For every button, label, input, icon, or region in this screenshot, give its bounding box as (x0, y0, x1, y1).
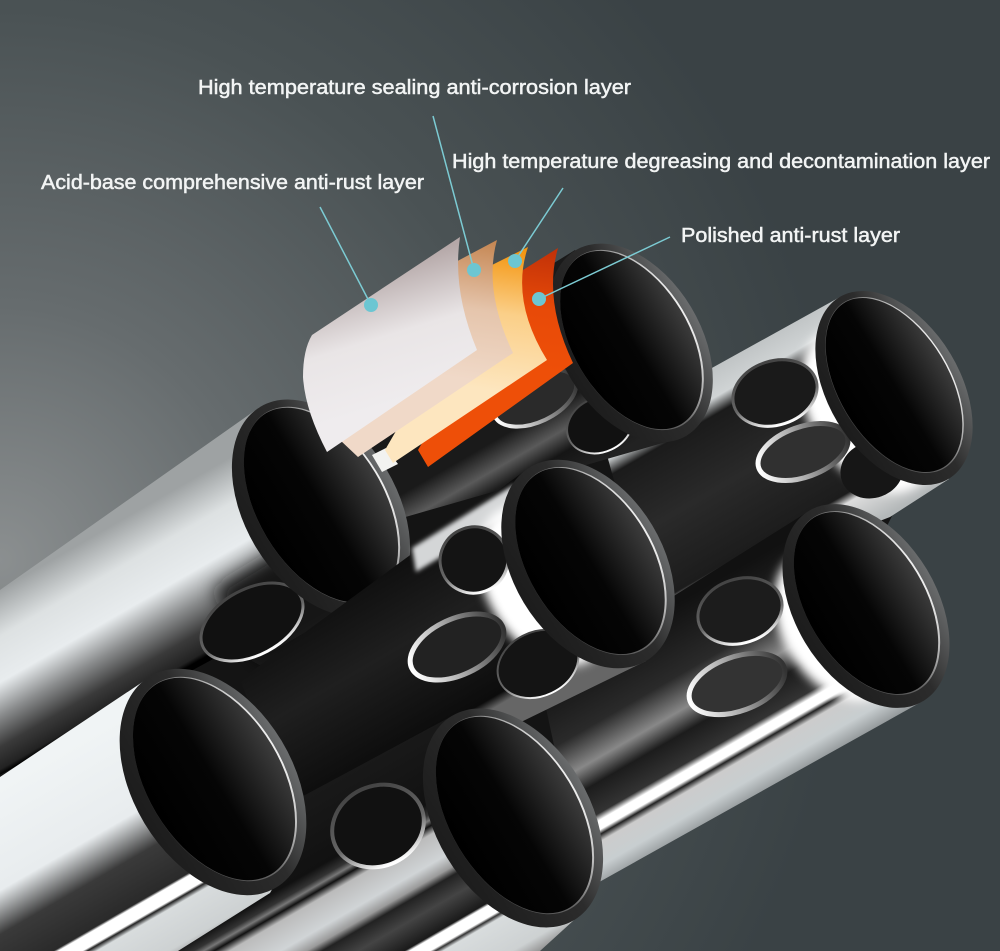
leader line and dot: degreasing layer (508, 188, 563, 268)
layer: polished anti-rust (418, 248, 573, 467)
label: sealing layer: High temperature sealing anti-corrosion layer (198, 76, 631, 99)
pipe: front bottom left (0, 635, 345, 951)
layer: sealing anti-corrosion (340, 240, 513, 457)
pipe: front bottom centre (150, 676, 640, 951)
pipe: back right (600, 263, 1000, 610)
white sliver (372, 448, 398, 472)
pipe: centre (240, 429, 710, 830)
layer: acid-base anti-rust (303, 237, 477, 452)
label: polished layer: Polished anti-rust layer (681, 224, 900, 247)
pipe: back centre (300, 214, 747, 520)
coating layers (303, 237, 573, 472)
leader line and dot: polished layer (532, 237, 670, 306)
leader line and dot: sealing layer (433, 116, 481, 277)
pipe: front right (540, 474, 984, 890)
dark filler between pipes (0, 430, 900, 880)
pipe: left (0, 368, 447, 775)
leader line and dot: acid-base layer (320, 207, 378, 312)
label: acid-base layer: Acid-base comprehensive anti-rust layer (41, 171, 424, 194)
layer: degreasing and decontamination (385, 247, 547, 463)
label: degreasing layer: High temperature degreasing and decontamination layer (452, 150, 990, 173)
